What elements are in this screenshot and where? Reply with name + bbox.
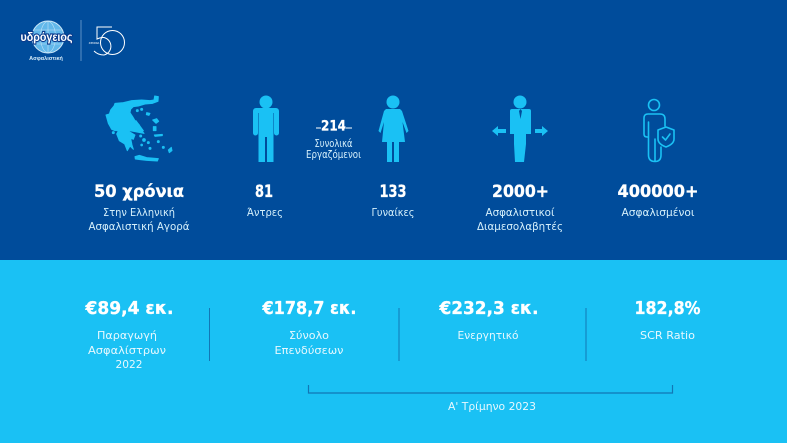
stat: women [372, 182, 414, 219]
stat: SCR ratio: 182,8% [634, 298, 700, 319]
stat: insured: Ασφαλισμένοι [622, 207, 695, 219]
icon: insured person with shield [644, 100, 674, 162]
stat: premiums [85, 298, 174, 371]
logo: 50 years [89, 27, 124, 55]
bracket: first quarter 2023 [308, 385, 672, 393]
stat: total employees: 214 [321, 118, 346, 134]
caption: first quarter 2023: Α' Τρίμηνο 2023 [448, 400, 536, 413]
stat: SCR ratio: SCR Ratio [640, 329, 695, 342]
stat: premiums: €89,4 εκ. [85, 298, 174, 319]
stat: premiums: Παραγωγή [97, 329, 157, 342]
stat: agents [477, 182, 563, 233]
stat: men: Άντρες [247, 207, 283, 219]
stat: 50 years: Στην Ελληνική [103, 207, 175, 219]
icon: man [253, 96, 279, 162]
stat: men: 81 [255, 182, 273, 201]
icon: map of Greece [106, 96, 172, 161]
icon: agent with arrows [492, 96, 548, 162]
stat: total employees [306, 118, 361, 161]
logo: Ydrogeios Insurance [20, 21, 72, 62]
panel: company overview [0, 0, 787, 260]
stat: women: 133 [380, 182, 406, 201]
logo subtitle: Ασφαλιστική [29, 56, 64, 62]
stat: total employees: Συνολικά [314, 138, 353, 150]
stat: assets [439, 298, 538, 342]
stat: investments: Επενδύσεων [274, 344, 344, 357]
stat: investments: Σύνολο [289, 329, 329, 342]
logo wordmark: υδρόγειος [20, 30, 72, 44]
stat: agents: Ασφαλιστικοί [486, 207, 555, 219]
logo: 50 years: ΧΡΟΝΙΑ [89, 41, 99, 45]
stat: insured: 400000+ [618, 182, 698, 201]
panel: financial results [0, 260, 787, 443]
icon: globe [32, 21, 64, 53]
stat: investments [262, 298, 356, 357]
stat: 50 years: 50 χρόνια [94, 182, 184, 201]
stat: insured [618, 182, 698, 219]
stat: agents: 2000+ [492, 182, 549, 201]
stat: investments: €178,7 εκ. [262, 298, 356, 319]
stat: agents: Διαμεσολαβητές [477, 221, 563, 233]
stat: assets: Ενεργητικό [458, 329, 519, 342]
stat: SCR ratio [634, 298, 700, 342]
stat: assets: €232,3 εκ. [439, 298, 538, 319]
stat: 50 years: Ασφαλιστική Αγορά [88, 221, 190, 233]
stat: premiums: Ασφαλίστρων [88, 344, 166, 357]
stat: 50 years [88, 182, 190, 233]
icon: woman [378, 96, 408, 162]
stat: men [247, 182, 283, 219]
stat: women: Γυναίκες [372, 207, 414, 219]
stat: premiums: 2022 [116, 358, 142, 371]
stat: total employees: Εργαζόμενοι [306, 149, 361, 161]
